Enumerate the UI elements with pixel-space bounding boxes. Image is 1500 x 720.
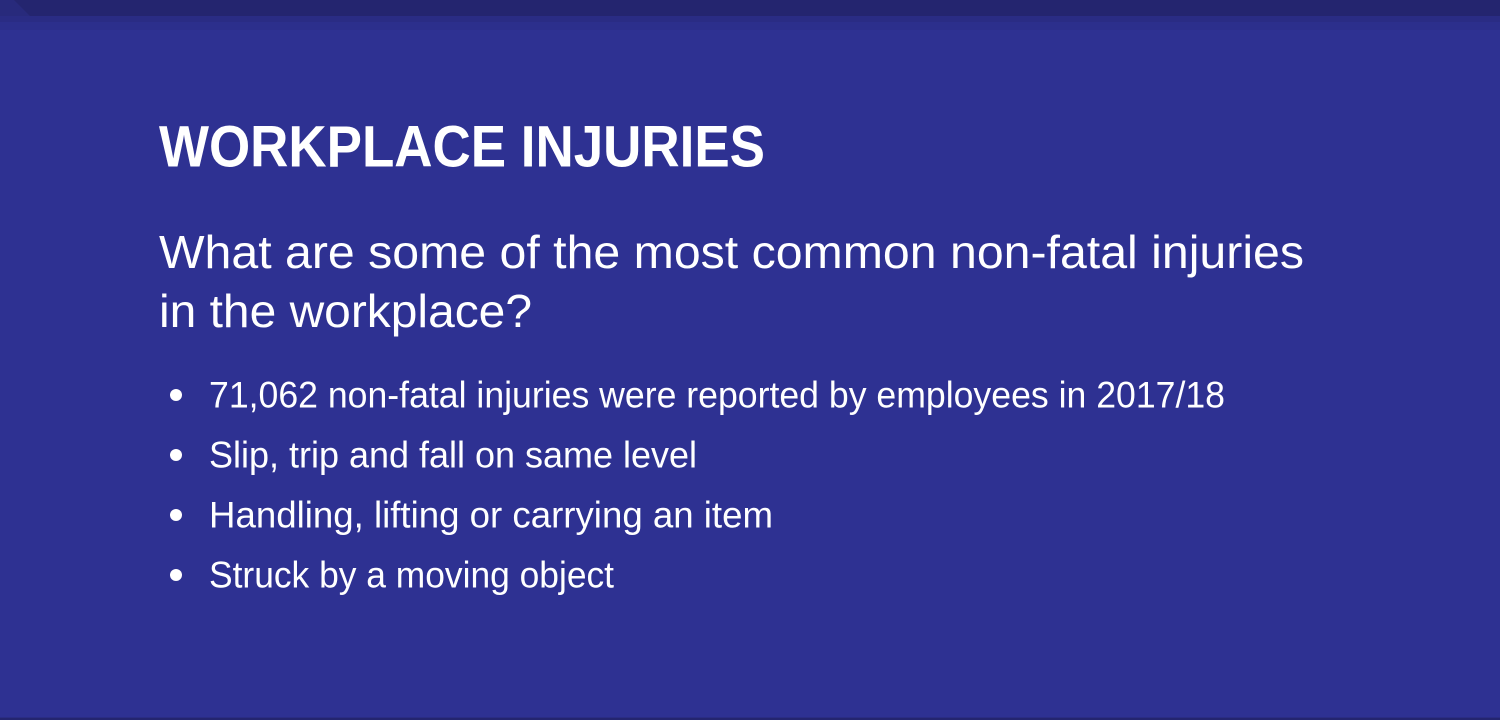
question heading xyxy=(159,226,1304,337)
question heading: in the workplace? xyxy=(159,285,532,337)
question heading: What are some of the most common non-fatal injuries xyxy=(159,226,1304,278)
bullet: struck by moving object: Struck by a moving object xyxy=(209,554,615,596)
bullet: handling, lifting or carrying: Handling, lifting or carrying an item xyxy=(209,494,773,536)
bullet: total injuries: 71,062 non-fatal injuries were reported by employees in 2017/18 xyxy=(209,374,1225,416)
title: WORKPLACE INJURIES xyxy=(159,114,765,180)
bullet list xyxy=(170,374,1225,596)
bullet: slip, trip and fall: Slip, trip and fall on same level xyxy=(209,434,697,476)
